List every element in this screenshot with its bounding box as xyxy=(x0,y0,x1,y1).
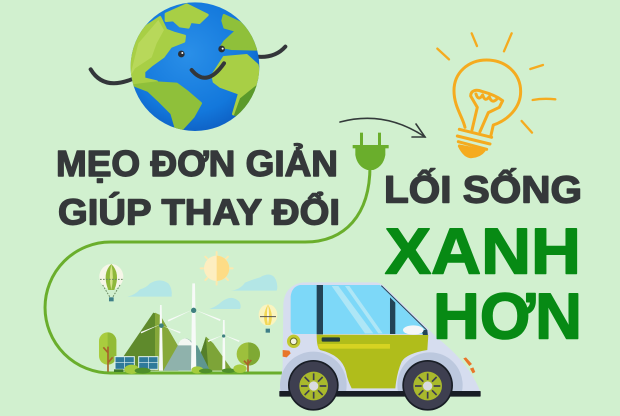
door xyxy=(317,335,428,388)
undercarriage xyxy=(279,391,481,397)
car xyxy=(279,282,481,416)
landscape illustration xyxy=(99,252,277,374)
hot air balloon: left xyxy=(99,264,123,301)
hot air balloon: right xyxy=(259,304,277,333)
face: smile xyxy=(192,63,224,78)
heading: hơn: HƠN xyxy=(433,280,582,352)
earth xyxy=(130,2,261,132)
bushes xyxy=(124,364,247,374)
lights xyxy=(283,350,475,373)
globe character xyxy=(91,2,285,132)
heading line 2: GIÚP THAY ĐỔI xyxy=(58,190,340,232)
arm: right xyxy=(257,47,285,57)
door stripe and handle xyxy=(318,344,390,349)
sun xyxy=(201,252,233,285)
window pillars xyxy=(317,285,428,337)
mirror xyxy=(403,325,424,335)
heading: xanh: XANH xyxy=(385,214,581,288)
window glare xyxy=(332,286,383,333)
wheel: front xyxy=(402,360,453,411)
trees xyxy=(99,332,260,372)
fuel cap xyxy=(287,335,300,348)
clouds xyxy=(127,275,277,309)
heading: left xyxy=(56,143,340,232)
wheel: rear xyxy=(288,360,339,411)
wheel arches xyxy=(280,352,462,391)
hill with white cap xyxy=(163,338,210,371)
icon: light bulb xyxy=(437,33,555,157)
bulb rays xyxy=(437,33,555,133)
wind turbines xyxy=(141,283,240,371)
icon: plug xyxy=(353,133,389,170)
arm: left xyxy=(91,69,132,83)
solar panels xyxy=(114,357,158,372)
face: eyes xyxy=(178,46,225,57)
green cable line xyxy=(45,166,370,373)
car body xyxy=(279,282,481,393)
mountains xyxy=(123,313,233,371)
heading line 1: MẸO ĐƠN GIẢN xyxy=(56,143,338,184)
windows xyxy=(291,285,427,334)
curved arrow xyxy=(340,118,425,137)
heading: lối sống: LỐI SỐNG xyxy=(384,166,582,212)
